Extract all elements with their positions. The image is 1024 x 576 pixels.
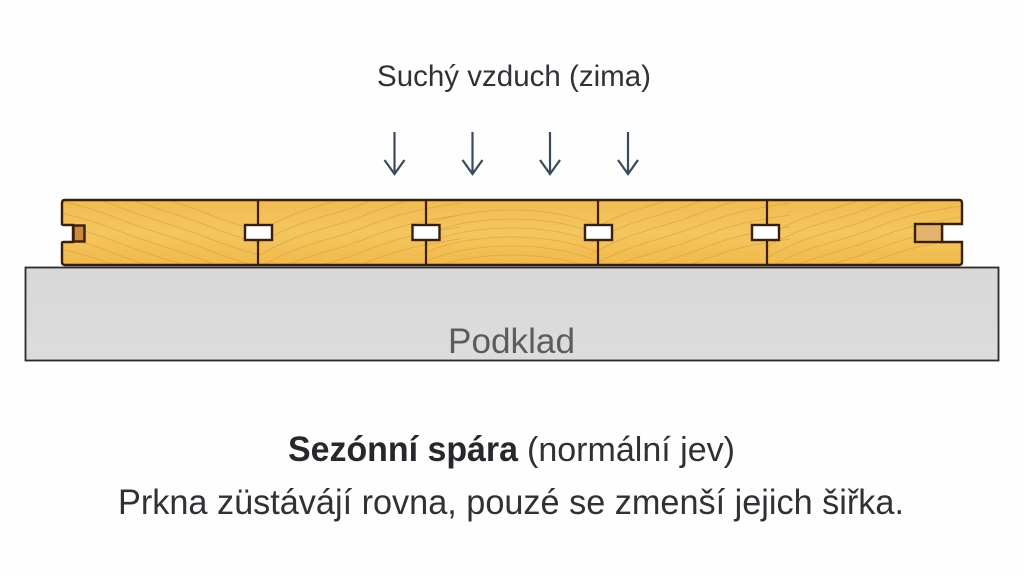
board bodies: [62, 200, 962, 265]
grain: board 1: [63, 201, 260, 264]
caption heading: [288, 430, 735, 469]
grain: board 5: [768, 201, 961, 264]
floorboards: [60, 198, 964, 266]
arrows: dry air pressing down: [384, 132, 638, 174]
left tongue: [74, 226, 84, 242]
arrow 1: [384, 132, 404, 174]
arrow 3: [540, 132, 560, 174]
board outline: [62, 200, 962, 265]
seams between boards: [258, 200, 767, 265]
gaps between boards: [245, 225, 779, 240]
caption heading: Sezónní spára: [288, 430, 519, 469]
grain: board 3: [427, 210, 597, 264]
infographic: seasonal gap in floorboards: [24, 64, 1000, 522]
grain: board 2: [260, 201, 460, 264]
right tongue: [915, 224, 942, 242]
caption heading: (normální jev): [527, 431, 735, 469]
label: subfloor: Podklad: [448, 322, 575, 361]
arrow 2: [462, 132, 482, 174]
panel: subfloor: [26, 268, 998, 361]
heading: dry air: Suchý vzduch (zima): [377, 60, 651, 93]
caption text: Prkna züstávájí rovna, pouzé se zmenší jejich šiřka.: [118, 483, 904, 522]
arrow 4: [618, 132, 638, 174]
grain: board 4: [590, 201, 790, 264]
wood grain: [63, 201, 961, 264]
